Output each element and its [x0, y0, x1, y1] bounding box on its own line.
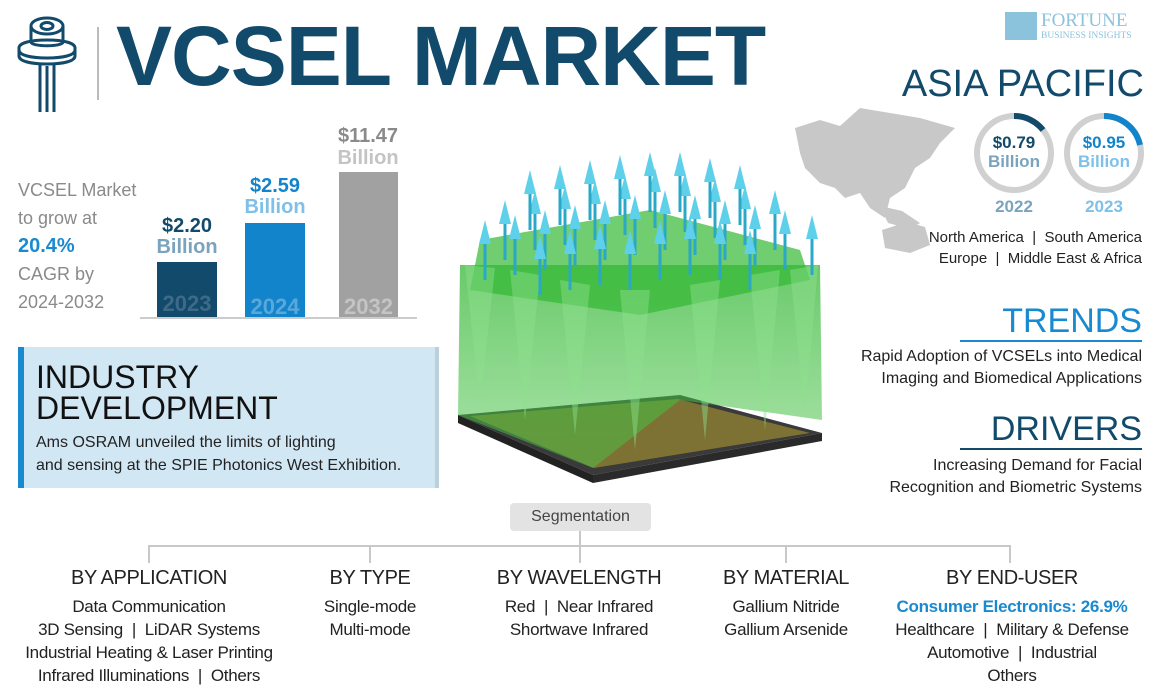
- bar chart: 2023: [163, 291, 211, 316]
- segment: end-user: BY END-USER: [946, 567, 1078, 589]
- segment: wavelength: [497, 567, 661, 639]
- text: trends: [861, 348, 1142, 387]
- text: regions: North America | South America: [929, 229, 1142, 246]
- segment: material: Gallium Nitride: [732, 597, 839, 616]
- segment: material: [723, 567, 849, 639]
- segment: application: Data Communication: [72, 597, 226, 616]
- segment: end-user: Healthcare | Military & Defense: [895, 620, 1129, 639]
- donut 2022: $0.79: [993, 133, 1035, 152]
- segment: application: Infrared Illuminations | Others: [38, 666, 260, 685]
- chip plate: [458, 395, 822, 483]
- segmentation tree lines: [148, 531, 1011, 563]
- text: drivers: [889, 457, 1142, 496]
- panel: industry development: DEVELOPMENT: [36, 390, 278, 426]
- segmentation label: [510, 503, 651, 531]
- bar chart: $2.20: [162, 215, 212, 237]
- segment: wavelength: Red | Near Infrared: [505, 597, 653, 616]
- title: VCSEL MARKET: [116, 9, 765, 103]
- segment: type: Single-mode: [324, 597, 416, 616]
- text: drivers: Recognition and Biometric Systems: [889, 479, 1142, 496]
- donut 2022: 2022: [995, 197, 1033, 216]
- segment: type: Multi-mode: [329, 620, 411, 639]
- chip illustration: [458, 152, 822, 483]
- heading: asia pacific: ASIA PACIFIC: [902, 63, 1144, 105]
- logo: BUSINESS INSIGHTS: [1041, 31, 1132, 41]
- text: CAGR: VCSEL Market: [18, 180, 136, 200]
- segment: application: BY APPLICATION: [71, 567, 227, 589]
- text: CAGR: 2024-2032: [18, 292, 104, 312]
- text: CAGR: to grow at: [18, 208, 97, 228]
- segment: application: [25, 567, 273, 685]
- panel: industry development: [18, 347, 435, 488]
- text: trends: Rapid Adoption of VCSELs into Medical: [861, 348, 1142, 365]
- donut 2023: 2023: [1085, 197, 1123, 216]
- donut 2023: $0.95: [1083, 133, 1125, 152]
- segment: application: 3D Sensing | LiDAR Systems: [38, 620, 260, 639]
- segment: end-user: [895, 567, 1129, 685]
- map: asia: [795, 108, 955, 253]
- bar chart: $2.59: [250, 175, 300, 197]
- segmentation label: Segmentation: [531, 508, 630, 525]
- donut 2023: [1064, 113, 1144, 216]
- segment: material: BY MATERIAL: [723, 567, 849, 589]
- green beams: [458, 210, 822, 468]
- logo: FORTUNE: [1041, 10, 1127, 31]
- donut 2022: [974, 113, 1054, 216]
- text: regions: [929, 229, 1142, 267]
- arrows: [479, 152, 818, 295]
- segment: wavelength: BY WAVELENGTH: [497, 567, 661, 589]
- donut 2022: Billion: [988, 152, 1040, 171]
- segment: type: BY TYPE: [330, 567, 410, 589]
- heading: drivers: DRIVERS: [991, 410, 1142, 448]
- icon: vcsel package: [18, 16, 76, 112]
- segment: material: Gallium Arsenide: [724, 620, 848, 639]
- text: CAGR: CAGR by: [18, 264, 94, 284]
- segment: end-user: Automotive | Industrial: [927, 643, 1097, 662]
- donut 2023: Billion: [1078, 152, 1130, 171]
- segment: end-user: Others: [987, 666, 1037, 685]
- text: drivers: Increasing Demand for Facial: [933, 457, 1142, 474]
- logo: [1005, 10, 1132, 41]
- segment: type: [324, 567, 416, 639]
- bar chart: Billion: [244, 196, 306, 218]
- bar chart: Billion: [337, 147, 399, 169]
- panel: industry development: INDUSTRY: [36, 359, 199, 395]
- text: CAGR: [18, 180, 136, 312]
- text: trends: Imaging and Biomedical Applications: [881, 370, 1142, 387]
- segment: wavelength: Shortwave Infrared: [510, 620, 648, 639]
- text: CAGR: 20.4%: [18, 235, 75, 257]
- text: regions: Europe | Middle East & Africa: [939, 250, 1142, 267]
- bar chart: Billion: [156, 236, 218, 258]
- bar chart: [140, 125, 417, 319]
- panel: industry development: and sensing at the SPIE Photonics West Exhibition.: [36, 457, 401, 474]
- segment: application: Industrial Heating & Laser Printing: [25, 643, 273, 662]
- bar chart: $11.47: [338, 125, 398, 147]
- heading: trends: TRENDS: [1002, 302, 1142, 340]
- panel: industry development: Ams OSRAM unveiled the limits of lighting: [36, 434, 336, 451]
- segment: end-user: Consumer Electronics: 26.9%: [897, 597, 1127, 616]
